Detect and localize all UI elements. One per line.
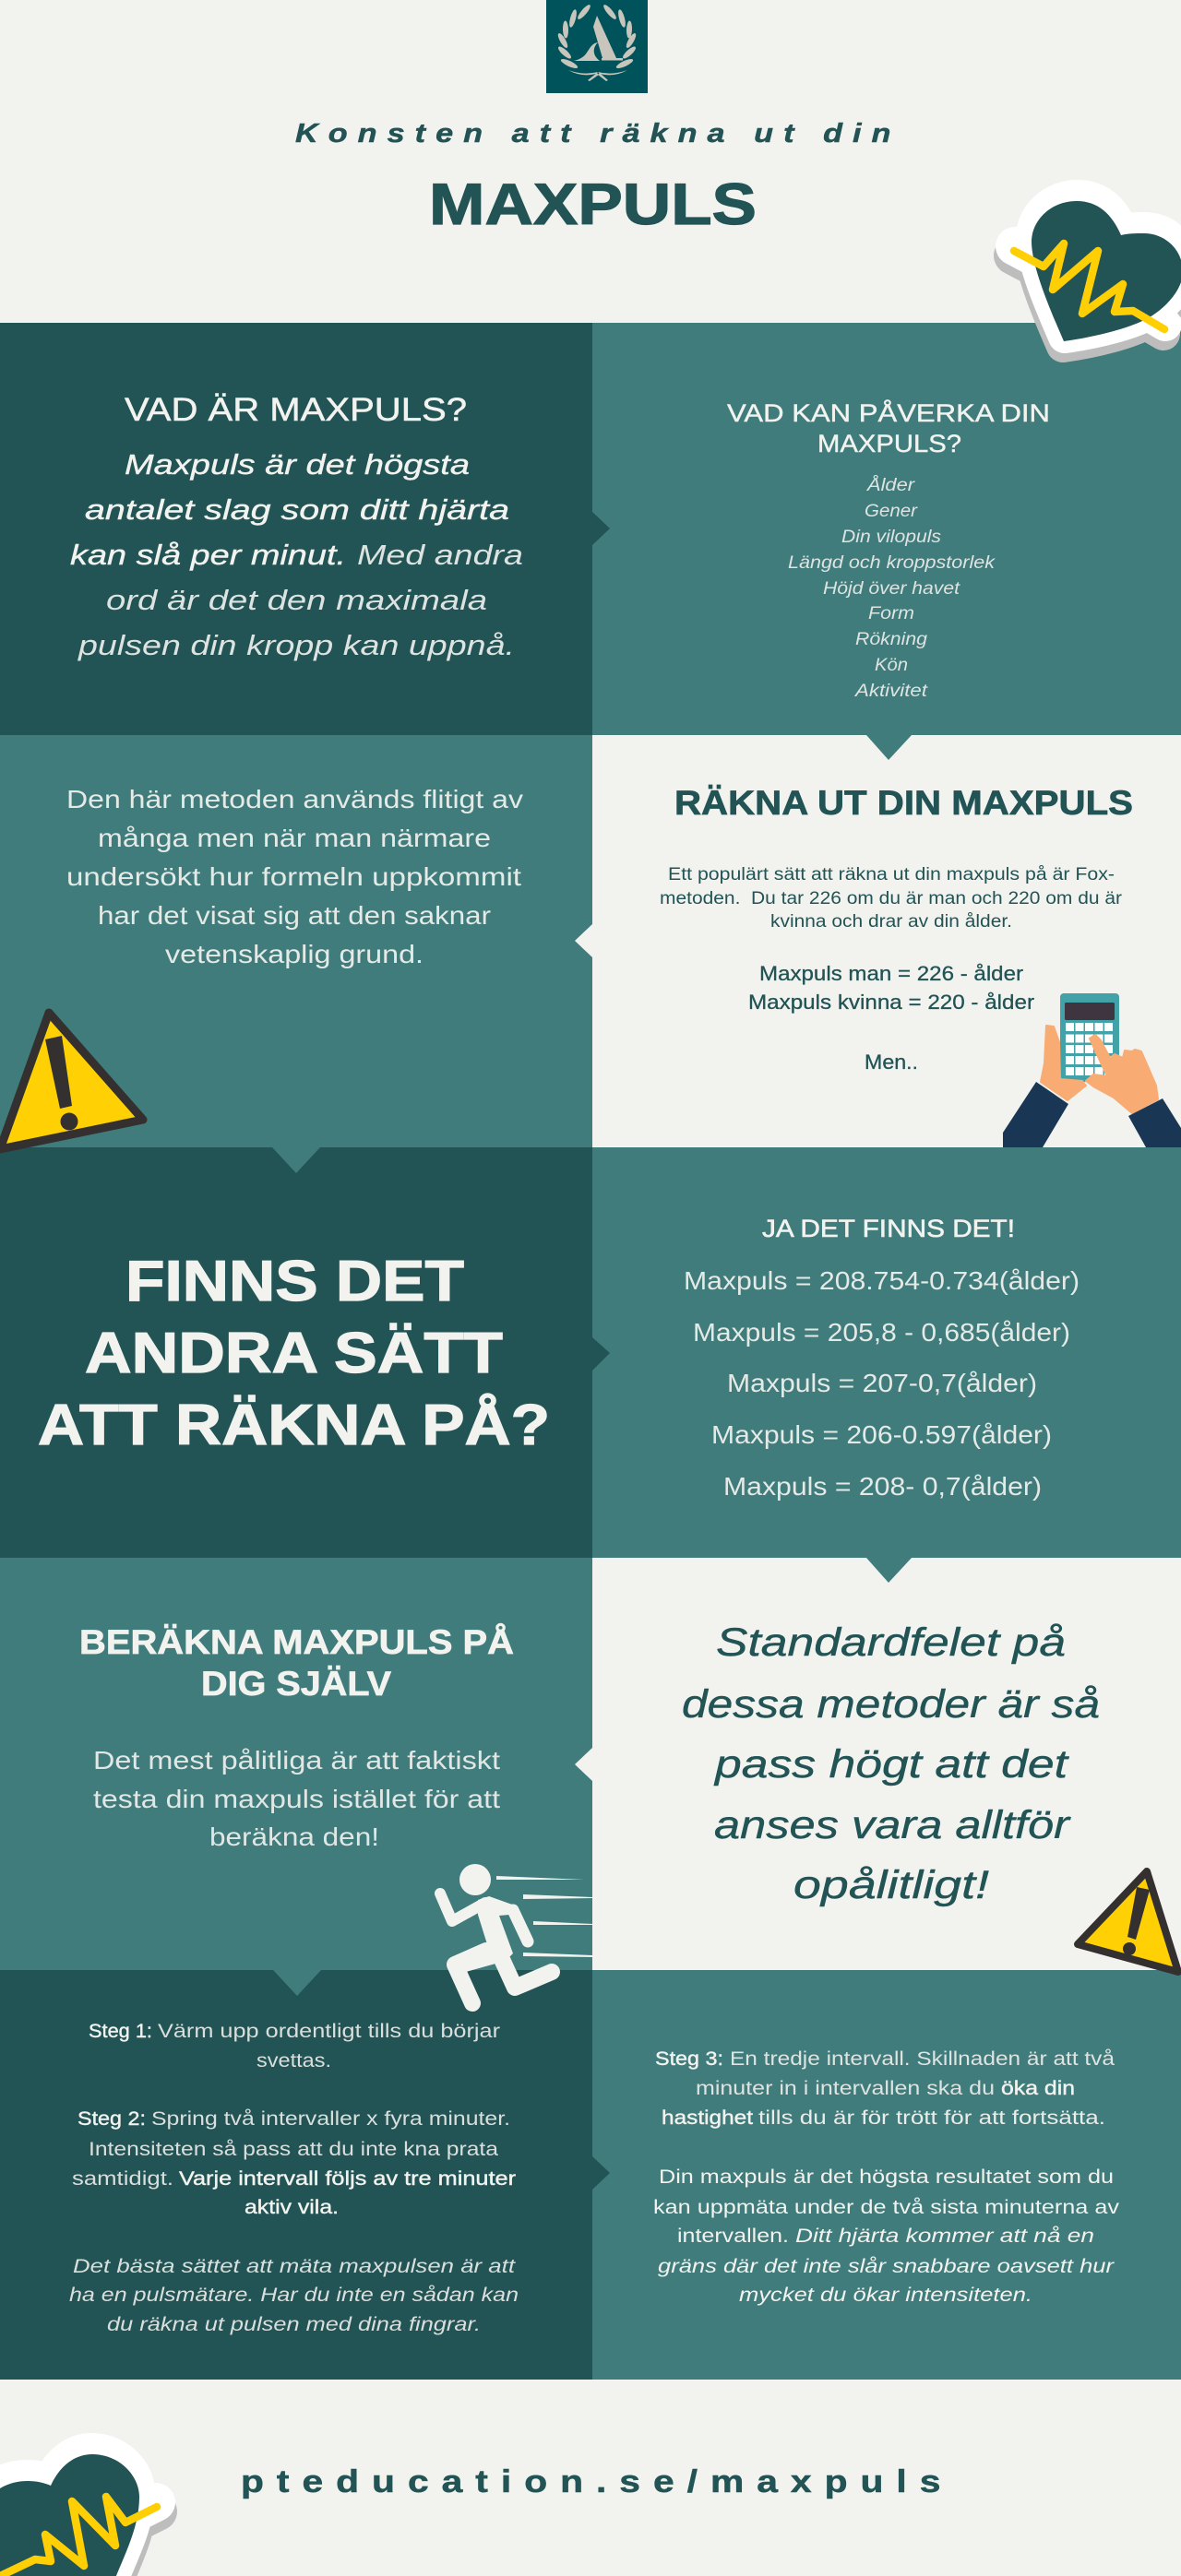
text block: vad är maxpuls: [70, 392, 523, 661]
arrow: standardfelet points left: [575, 1748, 592, 1781]
text block: vad kan påverka din maxpuls: Kön: [875, 656, 908, 675]
text block: metoden saknar vetenskaplig grund: Den här metoden används flitigt av: [66, 785, 523, 813]
text block: vad är maxpuls: kan slå per minut.: [70, 539, 346, 571]
text block: alternativa formler: JA DET FINNS DET!: [762, 1215, 1015, 1242]
text block: standardfelet: [682, 1620, 1100, 1907]
text block: beräkna maxpuls på dig själv: DIG SJÄLV: [201, 1665, 391, 1703]
arrow: metod-kritik points down: [272, 1147, 320, 1173]
text block: räkna ut din maxpuls: Maxpuls kvinna = 220 - ålder: [748, 991, 1034, 1014]
text block: standardfelet: dessa metoder är så: [682, 1682, 1100, 1727]
text block: steg 1 och steg 2: du räkna ut pulsen med dina fingrar.: [107, 2314, 481, 2335]
heading: finns det andra sätt att räkna på: ANDRA SÄTT: [85, 1322, 503, 1385]
panel: formler background: [592, 1147, 1181, 1558]
text block: steg 1 och steg 2: Steg 2:: [78, 2108, 146, 2130]
text block: steg 1 och steg 2: samtidigt.: [72, 2168, 173, 2190]
text block: vad är maxpuls: Med andra: [357, 539, 523, 571]
icon: hands with calculator: [1003, 993, 1181, 1147]
arrow: beräkna points down: [273, 1970, 321, 1996]
text block: beräkna maxpuls på dig själv: BERÄKNA MAXPULS PÅ: [79, 1623, 514, 1661]
text block: räkna ut din maxpuls: RÄKNA UT DIN MAXPULS: [674, 784, 1133, 822]
panel: finns det andra sätt background: [0, 1147, 592, 1558]
text block: steg 1 och steg 2: Intensiteten så pass att du inte kna prata: [89, 2139, 498, 2160]
arrow: vad är maxpuls points right: [592, 512, 610, 545]
text block: beräkna maxpuls på dig själv: beräkna den!: [209, 1822, 379, 1851]
subtitle: Konsten att räkna ut din: Konsten att räkna ut din: [295, 117, 890, 148]
text block: vad är maxpuls: Maxpuls är det högsta: [125, 448, 470, 481]
text block: alternativa formler: Maxpuls = 206-0.597(ålder): [711, 1420, 1052, 1449]
text block: standardfelet: opålitligt!: [793, 1863, 989, 1907]
text block: alternativa formler: Maxpuls = 207-0,7(ålder): [727, 1369, 1037, 1397]
panel: beräkna på dig själv background: [0, 1558, 592, 1970]
heading: finns det andra sätt att räkna på: ATT RÄKNA PÅ?: [38, 1394, 550, 1457]
text block: steg 3: Steg 3:: [655, 2048, 723, 2070]
text block: metoden saknar vetenskaplig grund: vetenskaplig grund.: [165, 940, 423, 968]
panel: vad kan påverka background: [592, 323, 1181, 735]
text block: alternativa formler: [684, 1215, 1080, 1501]
text block: vad är maxpuls: ord är det den maximala: [106, 584, 487, 616]
text block: räkna ut din maxpuls: Ett populärt sätt att räkna ut din maxpuls på är Fox-: [668, 865, 1115, 884]
text block: steg 3: kan uppmäta under de två sista minuterna av: [653, 2197, 1120, 2218]
heading: finns det andra sätt att räkna på: [38, 1250, 550, 1457]
icon: warning triangle left: [0, 1013, 143, 1149]
text block: steg 3: tills du är för trött för att fortsätta.: [758, 2107, 1105, 2129]
panel: standardfelet background: [592, 1558, 1181, 1970]
panel: metod-kritik background: [0, 735, 592, 1147]
text block: vad är maxpuls: antalet slag som ditt hjärta: [85, 493, 509, 526]
text block: beräkna maxpuls på dig själv: testa din maxpuls istället för att: [93, 1785, 500, 1813]
text block: steg 1 och steg 2: aktiv vila.: [245, 2197, 339, 2218]
text block: metoden saknar vetenskaplig grund: [66, 785, 523, 968]
text block: steg 3: Ditt hjärta kommer att nå en: [795, 2226, 1094, 2247]
text block: räkna ut din maxpuls: metoden. Du tar 226 om du är man och 220 om du är: [660, 889, 1123, 908]
text block: metoden saknar vetenskaplig grund: många men när man närmare: [98, 824, 491, 852]
text block: steg 3: intervallen.: [677, 2226, 789, 2247]
icon: running person: [440, 1864, 592, 2003]
text block: steg 1 och steg 2: [69, 2021, 519, 2335]
text block: steg 3: mycket du ökar intensiteten.: [739, 2285, 1032, 2306]
arrow: finns det points right: [592, 1337, 610, 1371]
text block: steg 1 och steg 2: Steg 1:: [89, 2021, 152, 2042]
footer url: pteducation.se/maxpuls: [241, 2463, 940, 2499]
text block: steg 1 och steg 2: Värm upp ordentligt tills du börjar: [158, 2021, 500, 2042]
text block: alternativa formler: Maxpuls = 208.754-0.734(ålder): [684, 1266, 1080, 1295]
arrow: påverka points down: [866, 735, 912, 760]
text block: vad kan påverka din maxpuls: Rökning: [855, 630, 927, 649]
icon: warning triangle right: [1078, 1871, 1178, 1972]
text block: steg 3: Din maxpuls är det högsta resultatet som du: [659, 2166, 1114, 2188]
text block: steg 3: [653, 2048, 1120, 2306]
text block: vad kan påverka din maxpuls: Höjd över havet: [823, 579, 960, 599]
text block: räkna ut din maxpuls: kvinna och drar av din ålder.: [770, 912, 1012, 932]
text block: vad kan påverka din maxpuls: [727, 398, 1050, 701]
text block: vad kan påverka din maxpuls: Gener: [865, 502, 918, 521]
text block: vad kan påverka din maxpuls: Ålder: [866, 476, 915, 495]
text block: steg 1 och steg 2: Det bästa sättet att mäta maxpulsen är att: [73, 2256, 516, 2277]
panel: steg 1 och 2 background: [0, 1970, 592, 2380]
text block: metoden saknar vetenskaplig grund: har det visat sig att den saknar: [98, 901, 491, 930]
text block: steg 3: hastighet: [662, 2107, 753, 2129]
title: MAXPULS: MAXPULS: [429, 172, 757, 237]
text block: alternativa formler: Maxpuls = 205,8 - 0,685(ålder): [693, 1318, 1070, 1347]
panel: räkna ut background: [592, 735, 1181, 1147]
text block: standardfelet: Standardfelet på: [716, 1620, 1066, 1665]
panel: steg 3 background: [592, 1970, 1181, 2380]
heading: finns det andra sätt att räkna på: FINNS DET: [125, 1250, 464, 1313]
text block: metoden saknar vetenskaplig grund: undersökt hur formeln uppkommit: [66, 862, 521, 891]
text block: vad kan påverka din maxpuls: Längd och kroppstorlek: [788, 553, 996, 573]
text block: vad kan påverka din maxpuls: Aktivitet: [854, 682, 928, 701]
text block: steg 3: En tredje intervall. Skillnaden är att två: [730, 2048, 1115, 2070]
text block: steg 1 och steg 2: svettas.: [256, 2050, 331, 2071]
text block: vad är maxpuls: pulsen din kropp kan uppnå.: [78, 629, 515, 661]
text block: steg 1 och steg 2: Varje intervall följs av tre minuter: [179, 2168, 516, 2190]
text block: räkna ut din maxpuls: Maxpuls man = 226 - ålder: [759, 962, 1023, 985]
arrow: räkna ut points left: [575, 924, 592, 957]
text block: vad är maxpuls: VAD ÄR MAXPULS?: [125, 392, 467, 428]
text block: steg 1 och steg 2: ha en pulsmätare. Har du inte en sådan kan: [69, 2285, 519, 2306]
text block: vad kan påverka din maxpuls: MAXPULS?: [817, 430, 961, 457]
text block: beräkna maxpuls på dig själv: [79, 1623, 514, 1851]
text block: beräkna maxpuls på dig själv: Det mest pålitliga är att faktiskt: [93, 1746, 500, 1775]
text block: alternativa formler: Maxpuls = 208- 0,7(ålder): [723, 1472, 1042, 1501]
text block: standardfelet: anses vara alltför: [714, 1803, 1071, 1847]
text block: steg 3: öka din: [1001, 2078, 1075, 2099]
text block: steg 3: gräns där det inte slår snabbare oavsett hur: [658, 2256, 1115, 2277]
icon: heart sticker bottom left: [0, 2450, 158, 2576]
text block: räkna ut din maxpuls: Men..: [865, 1051, 918, 1074]
text block: vad kan påverka din maxpuls: Form: [868, 604, 914, 623]
arrow: steg points right: [592, 2156, 610, 2190]
text block: standardfelet: pass högt att det: [713, 1742, 1069, 1787]
text block: vad kan påverka din maxpuls: Din vilopuls: [841, 528, 942, 547]
icon: logo: [546, 0, 648, 93]
text block: steg 1 och steg 2: Spring två intervaller x fyra minuter.: [151, 2108, 510, 2130]
icon: heart sticker top right: [1013, 196, 1181, 346]
text block: steg 3: minuter in i intervallen ska du: [696, 2078, 995, 2099]
text block: vad kan påverka din maxpuls: VAD KAN PÅVERKA DIN: [727, 398, 1050, 427]
arrow: formler points down: [866, 1558, 912, 1583]
panel: vad är maxpuls background: [0, 323, 592, 735]
text block: räkna ut din maxpuls: [660, 784, 1133, 1074]
